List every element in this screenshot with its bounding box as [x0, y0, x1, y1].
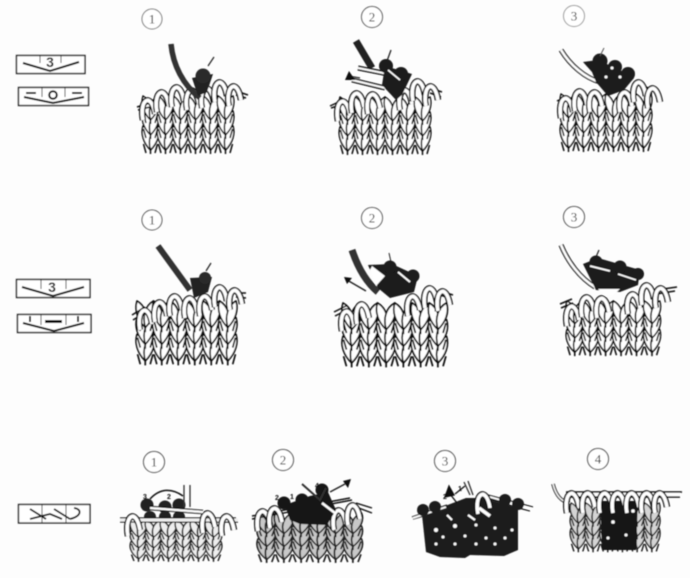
step number 3: 3 [571, 8, 577, 24]
chart symbol: decrease with dash [18, 314, 91, 332]
step number 2 [362, 6, 382, 28]
step number 1: 1 [149, 212, 155, 228]
knitting step 1 [137, 44, 248, 154]
panel: top row [16, 6, 660, 155]
knitting step 3 [557, 48, 660, 152]
step number 3: 3 [571, 210, 577, 224]
knitting step 4 [553, 484, 682, 552]
knitting step 3: 2 [443, 494, 447, 501]
step number 1 [144, 452, 164, 472]
step number 2: 2 [280, 452, 286, 468]
chart symbol: decrease with 3: 3 [48, 279, 56, 295]
step number 4: 4 [595, 452, 602, 466]
panel: middle row [16, 206, 677, 367]
knitting step 2 [330, 41, 442, 155]
step number 2: 2 [369, 10, 375, 24]
knitting step 2: 1 [290, 494, 294, 501]
step number 1: 1 [151, 454, 157, 470]
step number 2 [362, 208, 382, 228]
chart symbol: decrease with 3 [16, 54, 85, 74]
step number 2 [272, 450, 294, 470]
step number 1 [142, 9, 162, 29]
chart symbol: decrease with circle [18, 88, 88, 106]
knitting step 1: 3 [143, 494, 147, 501]
chart symbol: decrease with 3: 3 [46, 54, 54, 70]
step number 4 [588, 448, 608, 470]
knitting step 1 [120, 485, 238, 562]
step number 3 [564, 6, 584, 26]
panel: bottom row [18, 448, 682, 563]
chart symbol: crossed stitches [18, 504, 90, 523]
step number 3 [434, 450, 456, 472]
knitting step 2 [334, 250, 453, 367]
step number 1: 1 [149, 12, 155, 26]
knitting step 2: 2 [275, 495, 279, 502]
knitting step 3: 1 [458, 486, 462, 493]
knitting step 2: 4 [315, 483, 319, 490]
step number 1 [142, 210, 162, 230]
knitting step 1: 2 [167, 494, 171, 501]
chart symbol: decrease with 3 [16, 279, 90, 298]
knitting step 1 [132, 246, 246, 365]
step number 3 [564, 206, 584, 228]
knitting step 2 [252, 479, 372, 563]
knitting step 3 [412, 481, 533, 558]
step number 3: 3 [442, 454, 448, 468]
knitting step 3 [560, 245, 677, 356]
step number 2: 2 [369, 210, 375, 226]
